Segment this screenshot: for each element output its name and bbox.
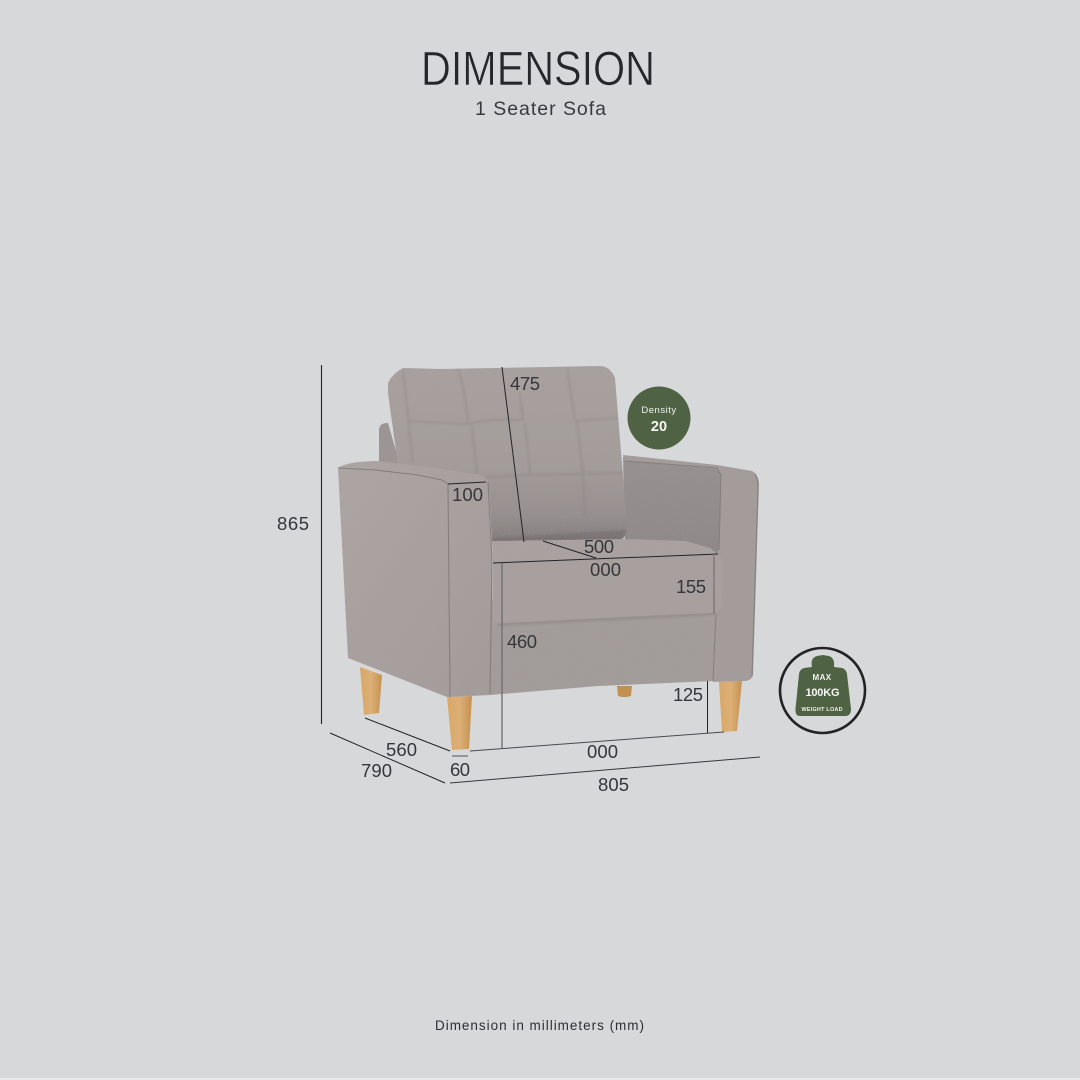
base front: [490, 600, 716, 695]
dimension labels: 000: [590, 559, 621, 580]
dimension labels: 790: [361, 760, 392, 781]
weight load badge: MAX: [813, 673, 832, 682]
density badge: [628, 386, 690, 450]
backrest lower shadow: [492, 530, 626, 544]
dimension labels: 500: [584, 536, 614, 557]
backrest cushion: [388, 366, 627, 544]
dimension labels: 475: [510, 373, 540, 394]
seat cushion top: [492, 539, 722, 564]
right arm outer panel: [623, 455, 759, 682]
title: DIMENSION: [421, 43, 655, 96]
dimension labels: 155: [676, 576, 706, 597]
dimension lines: [322, 365, 760, 783]
sofa leg: front left: [447, 696, 472, 750]
upholstery: [338, 366, 759, 697]
dimension labels: 805: [598, 774, 629, 795]
sofa illustration: [338, 366, 759, 750]
weight load badge: WEIGHT LOAD: [802, 707, 843, 713]
seat cushion front: [492, 555, 723, 623]
dimension labels: 460: [507, 631, 537, 652]
weight load badge: [780, 648, 865, 733]
dimension labels: 000: [587, 741, 618, 762]
sofa leg: rear left: [360, 667, 382, 715]
weight load badge: 100KG: [806, 687, 840, 699]
dimension labels: 125: [673, 684, 703, 705]
right arm inner face: [623, 457, 722, 556]
density badge: 20: [651, 419, 667, 435]
right arm piping: [625, 461, 758, 681]
subtitle: 1 Seater Sofa: [475, 98, 606, 120]
backrest tufting seams: [402, 370, 612, 476]
footer note: Dimension in millimeters (mm): [435, 1018, 644, 1033]
sofa leg: front right: [719, 681, 742, 732]
dimension labels: 60: [450, 759, 470, 780]
left arm side: [338, 461, 492, 697]
left arm seams and piping: [338, 468, 492, 697]
dimension labels: 100: [452, 484, 483, 505]
dimension labels: [277, 373, 706, 795]
cushion lower shadow: [498, 612, 714, 626]
dimension labels: 560: [386, 739, 417, 760]
sofa leg: rear right: [617, 686, 632, 697]
density badge: Density: [641, 405, 677, 416]
back frame: [379, 423, 402, 472]
dimension labels: 865: [277, 513, 309, 534]
